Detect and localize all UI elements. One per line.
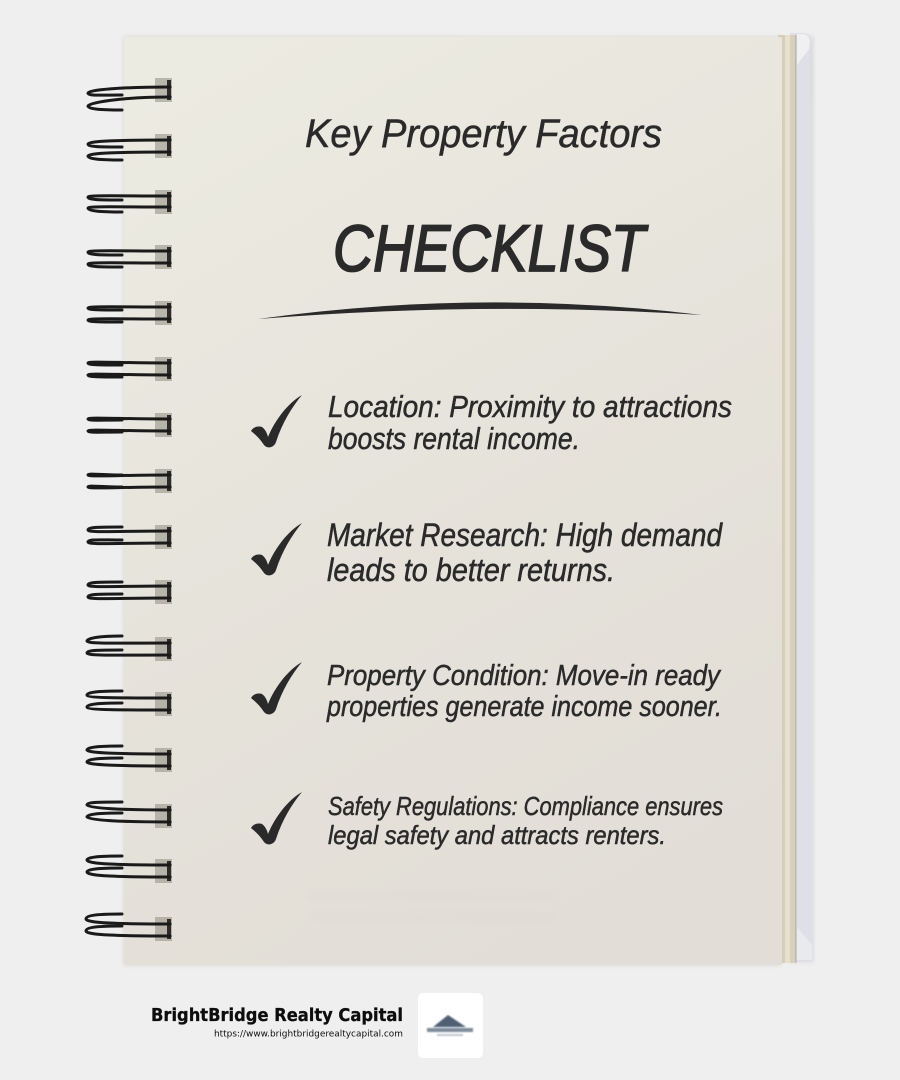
brand url: https://www.brightbridgerealtycapital.com bbox=[214, 1030, 403, 1040]
heading: Key Property Factors: Key Property Factors bbox=[305, 112, 662, 156]
icon: check mark bbox=[251, 662, 302, 714]
ring 13 bbox=[87, 746, 172, 772]
checklist item: Safety Regulations bbox=[251, 791, 723, 850]
brand name: BrightBridge Realty Capital bbox=[151, 1005, 403, 1026]
text: Property Condition: properties generate income sooner. bbox=[326, 691, 722, 723]
checklist item: Location bbox=[251, 389, 732, 456]
text: Property Condition: Property Condition: Move-in ready bbox=[327, 660, 721, 692]
checklist item: Market Research bbox=[251, 517, 723, 588]
ring 12 bbox=[87, 691, 172, 716]
text: Location: boosts rental income. bbox=[328, 421, 580, 456]
ring 1 bbox=[88, 78, 172, 110]
text: Market Research: Market Research: High demand bbox=[327, 517, 723, 553]
text: Location: Location: Proximity to attractions bbox=[328, 389, 732, 424]
icon: check mark bbox=[251, 523, 302, 575]
paper page bbox=[124, 37, 782, 965]
ring 7 bbox=[88, 413, 172, 437]
heading: CHECKLIST: CHECKLIST bbox=[333, 211, 649, 285]
icon: check mark bbox=[251, 395, 302, 447]
footer brand bbox=[151, 993, 483, 1058]
icon: check mark bbox=[251, 792, 302, 844]
ring 14 bbox=[87, 802, 172, 828]
notebook bbox=[124, 33, 814, 965]
ring 4 bbox=[88, 245, 172, 269]
ring 8 bbox=[88, 469, 172, 493]
ring 5 bbox=[88, 301, 172, 325]
checklist item: Property Condition bbox=[251, 660, 722, 723]
ring 16 bbox=[86, 914, 172, 941]
underline stroke bbox=[258, 302, 702, 319]
ring 3 bbox=[88, 190, 172, 214]
text: Safety Regulations: Safety Regulations: Compliance ensures bbox=[328, 791, 723, 821]
page stack bbox=[778, 35, 796, 963]
text: Safety Regulations: legal safety and attracts renters. bbox=[328, 820, 666, 850]
ring 9 bbox=[88, 525, 172, 549]
ring 11 bbox=[87, 636, 172, 661]
spiral binding bbox=[86, 78, 172, 941]
logo bbox=[418, 993, 483, 1058]
ring 2 bbox=[88, 134, 172, 160]
back cover bbox=[790, 33, 814, 962]
ring 10 bbox=[88, 580, 172, 604]
ring 15 bbox=[87, 856, 172, 883]
text: Market Research: leads to better returns. bbox=[327, 552, 615, 588]
ring 6 bbox=[88, 357, 172, 381]
